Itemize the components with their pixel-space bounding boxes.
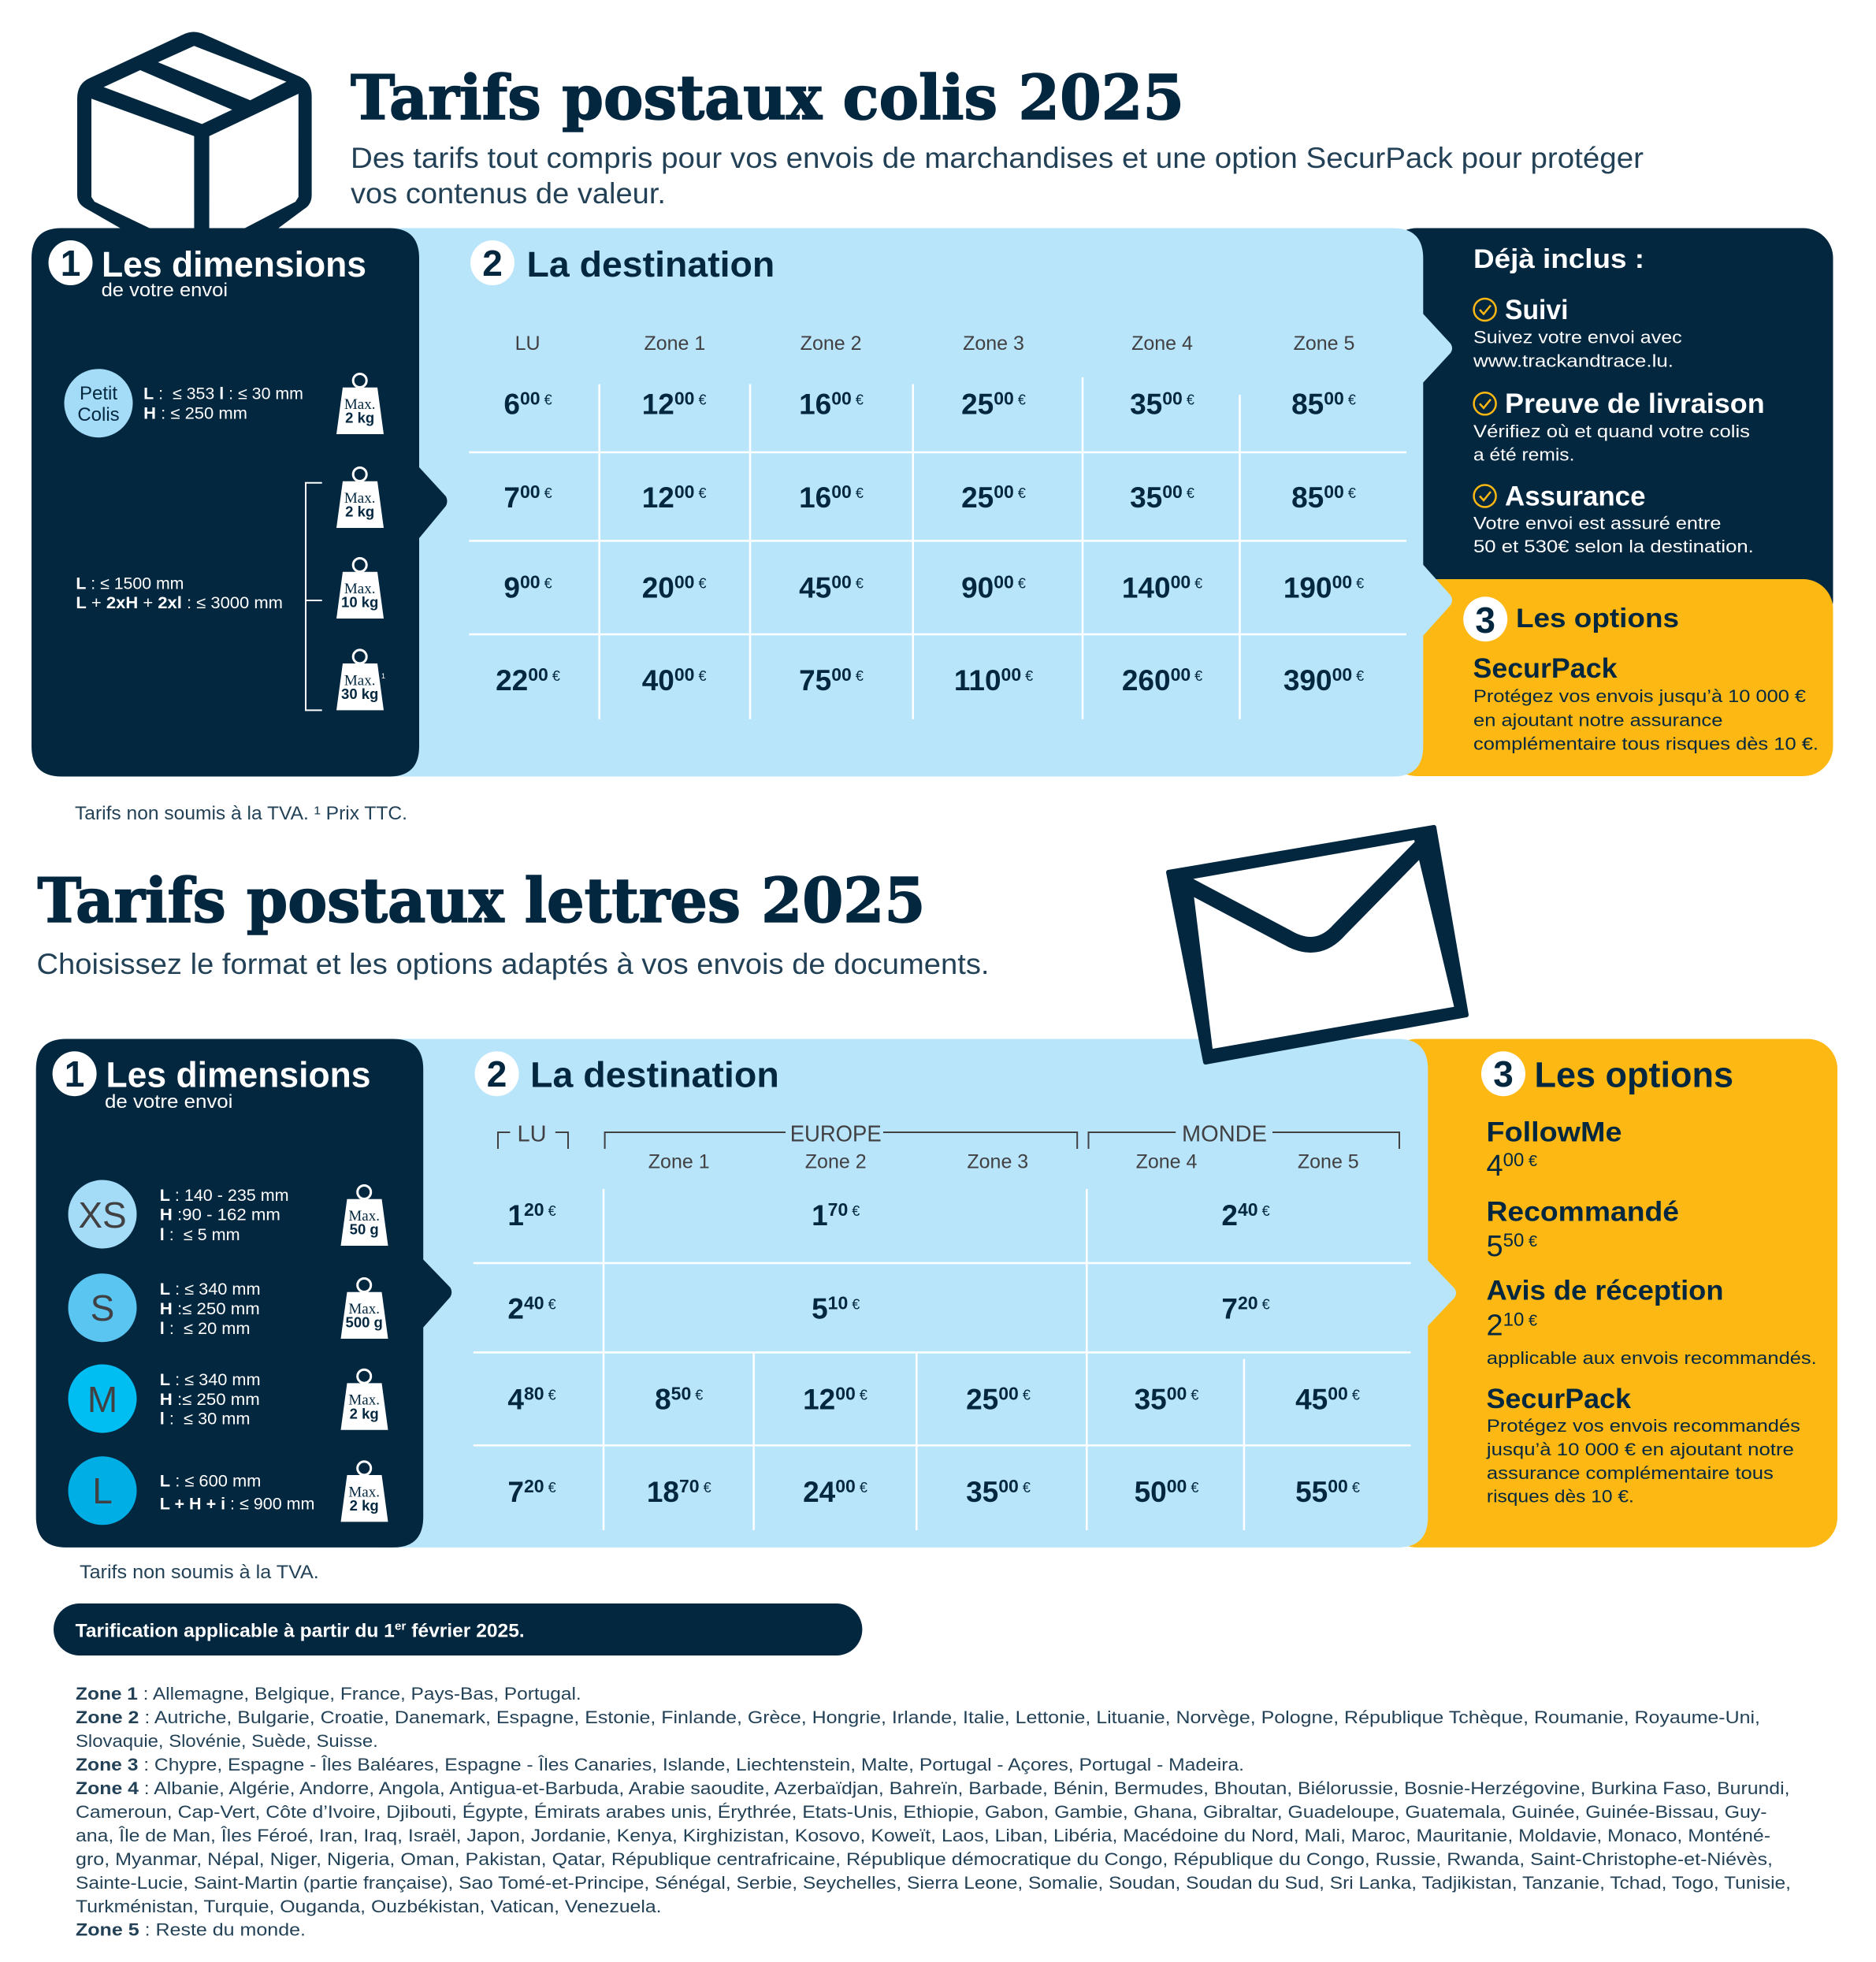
icon: weight 50 g: 50 g — [350, 1221, 379, 1238]
option: avis de reception: € — [1524, 1313, 1537, 1330]
price row 4: 50 — [1135, 1476, 1167, 1508]
price row 2: 20 — [1238, 1293, 1258, 1314]
item: suivi: Suivi — [1505, 295, 1568, 325]
price row 4: 00 — [1171, 664, 1191, 685]
icon: weight 50 g — [340, 1185, 388, 1246]
title: parcels: Tarifs postaux colis 2025 — [351, 62, 1184, 134]
price row 1: 16 — [799, 388, 831, 421]
price row 1 — [503, 388, 1356, 421]
price row 3: 140 — [1122, 572, 1171, 604]
price row 2: 7 — [1221, 1293, 1238, 1325]
text block: zone list: gro, Myanmar, Népal, Niger, Nigeria, Oman, Pakistan, Qatar, République centrafricaine, République démocratique du Congo, République du Congo, Russie, Rwanda, Saint-Christophe-et-Niévès, — [76, 1849, 1773, 1869]
table header: Zone 2 — [805, 1150, 867, 1172]
price row 4: 7 — [507, 1476, 524, 1508]
format: M: H :≤ 250 mm — [160, 1391, 260, 1409]
price row 2: 2 — [507, 1293, 524, 1325]
price row 4: 18 — [647, 1476, 679, 1508]
price row 2: 25 — [961, 481, 994, 514]
format: L: L — [92, 1470, 113, 1511]
item: preuve de livraison — [1473, 388, 1765, 465]
price row 4: 35 — [966, 1476, 998, 1508]
table header: Zone 5 — [1298, 1150, 1359, 1172]
format: XS: XS — [78, 1195, 127, 1236]
price row 1: € — [848, 1203, 860, 1219]
format: S: l : ≤ 20 mm — [160, 1320, 251, 1338]
option: securpack: Protégez vos envois recommandés — [1487, 1416, 1800, 1436]
price row 1: 00 — [1162, 388, 1183, 409]
intro text: parcels: vos contenus de valeur. — [351, 177, 666, 210]
price row 3: 00 — [674, 572, 694, 593]
option: followme: 00 — [1503, 1150, 1524, 1171]
price row 1: € — [852, 392, 864, 408]
price row 1: € — [1183, 392, 1194, 408]
format: L — [68, 1456, 315, 1525]
table header: Zone 4 — [1131, 333, 1193, 355]
price row 1: 00 — [994, 388, 1014, 409]
option: avis de reception — [1486, 1275, 1817, 1368]
table header: Zone 5 — [1294, 333, 1354, 355]
format: petit colis: Colis — [77, 404, 120, 425]
format: petit colis: Petit — [80, 383, 117, 404]
item: preuve de livraison: Vérifiez où et quand votre colis — [1473, 422, 1750, 441]
text block: zone list: Zone 2 : Autriche, Bulgarie, Croatie, Danemark, Espagne, Estonie, Finlande, Grèce, Hongrie, Irlande, Italie, Lettonie, Lituanie, Norvège, Pologne, République Tchèque, Roumanie, Royaume-Uni, — [76, 1707, 1760, 1727]
icon: weight 2 kg: 2 kg — [350, 1405, 379, 1421]
price row 3: 50 — [671, 1384, 691, 1404]
table header: LU — [515, 333, 541, 355]
price row 1: 85 — [1291, 388, 1324, 421]
heading: les dimensions — [105, 1054, 370, 1113]
price row 4: € — [694, 668, 706, 684]
icon: weight 30 kg: 30 kg — [341, 686, 378, 702]
table header: EUROPE — [790, 1122, 882, 1147]
format: S — [68, 1273, 261, 1342]
price row 4: € — [1021, 668, 1033, 684]
price row 4: 00 — [1001, 664, 1021, 685]
option: followme: FollowMe — [1486, 1117, 1622, 1148]
icon: weight 2 kg: 2 kg — [345, 410, 374, 426]
price row 4: 75 — [799, 664, 831, 697]
heading: les dimensions: Les dimensions — [102, 244, 366, 284]
option: securpack: assurance complémentaire tous — [1487, 1463, 1774, 1483]
price row 4: 260 — [1122, 664, 1171, 697]
badge: step 1 — [53, 1051, 97, 1096]
icon: weight 30 kg: Max. — [344, 672, 375, 689]
table header: Zone 1 — [644, 333, 705, 355]
price row 3: 00 — [1328, 1384, 1348, 1404]
price row 2: 10 — [828, 1293, 848, 1314]
text block: zone list: Turkménistan, Turquie, Ouganda, Ouzbékistan, Vatican, Venezuela. — [76, 1897, 662, 1916]
badge: step 1: 1 — [65, 1053, 84, 1094]
panel: dimensions letters — [36, 1039, 451, 1548]
icon: weight 500 g: Max. — [348, 1301, 380, 1317]
panel: options parcels — [1387, 579, 1833, 776]
format: M: L : ≤ 340 mm — [160, 1371, 261, 1389]
price row 3: € — [1019, 1387, 1031, 1403]
option: avis de reception: applicable aux envois recommandés. — [1487, 1348, 1817, 1368]
price row 3: 00 — [1332, 572, 1352, 593]
price row 1: € — [541, 392, 552, 408]
price row 4: 70 — [679, 1476, 700, 1496]
footnote: parcels: Tarifs non soumis à la TVA. ¹ Prix TTC. — [75, 803, 407, 824]
format: XS: L : 140 - 235 mm — [160, 1187, 289, 1205]
option: followme: € — [1524, 1153, 1537, 1170]
panel: destination letters — [378, 1039, 1456, 1548]
price row 2: 00 — [520, 481, 541, 502]
price row 2: € — [1258, 1297, 1270, 1313]
option: securpack: Protégez vos envois jusqu’à 10 000 € — [1473, 686, 1807, 706]
icon: weight 50 g: Max. — [348, 1208, 380, 1224]
price row 4: 00 — [1332, 664, 1352, 685]
price row 1: 12 — [642, 388, 674, 421]
heading: la destination: La destination — [530, 1054, 779, 1095]
price row 3: 20 — [642, 572, 674, 604]
icon: weight 500 g — [340, 1278, 388, 1339]
price row 3 — [503, 572, 1364, 604]
price row 2: 7 — [503, 481, 520, 514]
item: assurance: Votre envoi est assuré entre — [1473, 514, 1721, 533]
icon: weight 10 kg: 10 kg — [341, 594, 378, 611]
price row 2: 85 — [1291, 481, 1324, 514]
price row 2: 00 — [1324, 481, 1344, 502]
price row 3: 190 — [1283, 572, 1332, 604]
option: securpack: risques dès 10 €. — [1487, 1486, 1634, 1507]
price row 4: € — [1352, 668, 1364, 684]
table header: Zone 4 — [1136, 1150, 1198, 1172]
table header: Zone 1 — [648, 1150, 710, 1172]
format: L: L : ≤ 600 mm — [160, 1473, 261, 1491]
price row 3: 25 — [966, 1384, 998, 1415]
format: M: l : ≤ 30 mm — [160, 1410, 251, 1429]
price row 4: 00 — [1328, 1476, 1348, 1496]
price row 2: € — [1344, 485, 1356, 501]
option: followme — [1486, 1117, 1622, 1183]
price row 2: € — [852, 485, 864, 501]
format: L: L + H + i : ≤ 900 mm — [160, 1495, 315, 1513]
price row 3: € — [856, 1387, 867, 1403]
format: petit colis: L : ≤ 353 l : ≤ 30 mm — [143, 385, 303, 403]
price row 3: 4 — [507, 1384, 524, 1415]
price row 3: 90 — [961, 572, 994, 604]
table header: Zone 2 — [801, 333, 862, 355]
format: standard dimensions text: L + 2xH + 2xl : ≤ 3000 mm — [76, 594, 283, 612]
price row 4: € — [700, 1480, 711, 1496]
format: standard dimensions text: L : ≤ 1500 mm — [76, 574, 184, 593]
price row 2: € — [848, 1297, 860, 1313]
price row 1: 40 — [1238, 1199, 1258, 1220]
price row 3: 8 — [655, 1384, 671, 1415]
price row 1: 00 — [674, 388, 694, 409]
price row 4: 24 — [803, 1476, 835, 1508]
price row 4: € — [544, 1480, 556, 1496]
price row 1 — [507, 1199, 1270, 1232]
heading: les options: Les options — [1516, 604, 1679, 634]
price row 4: € — [1019, 1480, 1031, 1496]
price row 4: 00 — [835, 1476, 856, 1496]
icon: weight 30 kg — [336, 650, 385, 710]
format: standard dimensions text — [76, 574, 283, 612]
price row 3: 9 — [503, 572, 520, 604]
item: assurance: 50 et 530€ selon la destination. — [1473, 537, 1754, 556]
price row 3: € — [694, 576, 706, 592]
text block: zone list: Sainte-Lucie, Saint-Martin (partie française), Sao Tomé-et-Principe, Sénégal, Serbie, Seychelles, Sierra Leone, Somalie, Soudan, Soudan du Sud, Sri Lanka, Tadjikistan, Tanzanie, Tchad, Togo, Tunisie, — [76, 1873, 1791, 1893]
price row 2: 40 — [524, 1293, 544, 1314]
badge: step 3: 3 — [1475, 600, 1495, 641]
price row 4: 00 — [831, 664, 852, 685]
price row 3: 00 — [520, 572, 541, 593]
price row 2: 00 — [994, 481, 1014, 502]
option: avis de reception: 10 — [1503, 1310, 1524, 1330]
price row 1: 2 — [1221, 1199, 1238, 1232]
price row 1: € — [1344, 392, 1356, 408]
option: avis de reception: Avis de réception — [1486, 1275, 1724, 1306]
bracket — [306, 483, 322, 710]
price row 4: 22 — [496, 664, 528, 697]
icon: weight 2 kg: Max. — [344, 490, 375, 507]
price row 1: € — [1014, 392, 1026, 408]
icon: weight 2 kg: Max. — [344, 396, 375, 413]
callout: effective date — [54, 1603, 862, 1655]
heading: deja inclus: Déjà inclus : — [1473, 244, 1644, 274]
option: recommande: 50 — [1503, 1230, 1524, 1251]
price row 2: 5 — [812, 1293, 828, 1325]
callout: effective date: février 2025. — [406, 1621, 525, 1642]
price row 3: € — [691, 1387, 703, 1403]
price row 4: € — [852, 668, 864, 684]
price row 2: 12 — [642, 481, 674, 514]
format: S: H :≤ 250 mm — [160, 1300, 260, 1318]
intro text: parcels: Des tarifs tout compris pour vos envois de marchandises et une option SecurPack pour protéger — [351, 142, 1644, 174]
option: securpack — [1473, 653, 1818, 754]
item: preuve de livraison: a été remis. — [1473, 445, 1574, 465]
callout: effective date: er — [395, 1620, 407, 1633]
price row 3: 00 — [998, 1384, 1019, 1404]
option: securpack: jusqu’à 10 000 € en ajoutant notre — [1486, 1440, 1794, 1459]
icon: weight 2 kg — [340, 1462, 388, 1522]
price row 3: € — [544, 1387, 556, 1403]
icon: envelope — [1168, 827, 1466, 1062]
format: XS: l : ≤ 5 mm — [160, 1226, 240, 1244]
price row 3: € — [852, 576, 864, 592]
option: securpack — [1486, 1384, 1800, 1507]
price row 1: € — [544, 1203, 556, 1219]
price row 4: 40 — [642, 664, 674, 697]
price row 2: € — [541, 485, 552, 501]
icon: weight 2 kg: 2 kg — [350, 1497, 379, 1514]
option: avis de reception: 2 — [1486, 1310, 1503, 1343]
price row 3: 00 — [994, 572, 1014, 593]
price row 4 — [496, 664, 1364, 697]
icon: weight 10 kg — [336, 558, 384, 619]
price row 2: 00 — [1162, 481, 1183, 502]
price row 2: € — [1183, 485, 1194, 501]
price row 1: 1 — [507, 1199, 524, 1232]
format: petit colis: H : ≤ 250 mm — [143, 405, 247, 423]
option: recommande: 5 — [1486, 1230, 1503, 1263]
table header: LU — [517, 1122, 547, 1147]
price row 1: 20 — [524, 1199, 544, 1220]
price row 4: € — [1191, 668, 1202, 684]
intro text: letters: Choisissez le format et les options adaptés à vos envois de documents. — [36, 948, 990, 980]
title: letters: Tarifs postaux lettres 2025 — [38, 865, 925, 937]
text block: zone list: Slovaquie, Slovénie, Suède, Suisse. — [76, 1731, 378, 1751]
panel: destination parcels — [378, 229, 1452, 777]
heading: les dimensions: Les dimensions — [106, 1054, 370, 1095]
format: XS — [68, 1180, 289, 1248]
option: recommande — [1486, 1196, 1679, 1263]
badge: step 3 — [1481, 1051, 1525, 1096]
price row 3: 35 — [1135, 1384, 1167, 1415]
format: M — [68, 1365, 261, 1432]
option: securpack: SecurPack — [1486, 1384, 1632, 1414]
badge: step 2: 2 — [482, 243, 503, 284]
price row 4: 00 — [528, 664, 548, 685]
price row 3: 00 — [831, 572, 852, 593]
price row 2: € — [694, 485, 706, 501]
price row 4: € — [548, 668, 560, 684]
icon: parcel box — [77, 32, 312, 230]
price row 2: 16 — [799, 481, 831, 514]
panel: dimensions parcels — [32, 229, 448, 777]
text block: zone list — [76, 1684, 1791, 1940]
text block: zone list: Zone 3 : Chypre, Espagne - Îles Baléares, Espagne - Îles Canaries, Islande, Liechtenstein, Malte, Portugal - Açores, Portugal - Madeira. — [76, 1755, 1244, 1774]
badge: step 3 — [1463, 596, 1507, 641]
badge: step 1 — [49, 240, 93, 285]
icon: weight 2 kg — [340, 1369, 388, 1430]
price row 4 — [507, 1476, 1360, 1508]
price row 2 — [503, 481, 1356, 514]
text block: zone list: Zone 5 : Reste du monde. — [76, 1919, 306, 1940]
price row 1: 00 — [520, 388, 541, 409]
table header — [515, 333, 1354, 355]
badge: step 2 — [470, 240, 515, 285]
price row 3: 80 — [524, 1384, 544, 1404]
price row 4: 390 — [1283, 664, 1332, 697]
price row 3: 00 — [1171, 572, 1191, 593]
item: suivi: Suivez votre envoi avec — [1473, 327, 1682, 347]
price row 1: 35 — [1130, 388, 1162, 421]
option: recommande: Recommandé — [1486, 1196, 1679, 1228]
footnote: letters: Tarifs non soumis à la TVA. — [80, 1562, 319, 1583]
price row 4: € — [856, 1480, 867, 1496]
price row 4: € — [1187, 1480, 1198, 1496]
price row 1: 00 — [1324, 388, 1344, 409]
price row 3: € — [541, 576, 552, 592]
icon: weight 500 g: 500 g — [346, 1314, 383, 1331]
table header: MONDE — [1182, 1122, 1267, 1147]
icon: weight 2 kg: 2 kg — [345, 504, 374, 520]
icon: weight 30 kg: 1 — [381, 672, 385, 680]
table header — [498, 1122, 1399, 1172]
price row 3: 45 — [799, 572, 831, 604]
text block: zone list: Zone 1 : Allemagne, Belgique, France, Pays-Bas, Portugal. — [76, 1684, 581, 1704]
icon: weight 10 kg: Max. — [344, 581, 375, 597]
price row 1: 70 — [828, 1199, 848, 1220]
option: followme: 4 — [1486, 1150, 1503, 1183]
price row 4: 00 — [998, 1476, 1019, 1496]
icon: weight 2 kg: Max. — [348, 1484, 380, 1500]
badge: step 1: 1 — [61, 243, 80, 284]
heading: les dimensions: de votre envoi — [105, 1091, 232, 1113]
panel: included services — [1387, 229, 1833, 630]
price row 2: € — [544, 1297, 556, 1313]
format: M: M — [87, 1379, 117, 1420]
price row 3: 45 — [1295, 1384, 1328, 1415]
heading: les dimensions: de votre envoi — [102, 280, 228, 301]
option: securpack: en ajoutant notre assurance — [1473, 711, 1722, 730]
price row 2: € — [1014, 485, 1026, 501]
price row 3: € — [1014, 576, 1026, 592]
price row 3: € — [1348, 1387, 1360, 1403]
panel: options letters — [1387, 1039, 1837, 1548]
item: assurance: Assurance — [1505, 481, 1645, 511]
price row 3: 12 — [803, 1384, 835, 1415]
format: XS: H :90 - 162 mm — [160, 1206, 280, 1224]
text block: zone list: Zone 4 : Albanie, Algérie, Andorre, Angola, Antigua-et-Barbuda, Arabie saoudite, Azerbaïdjan, Bahreïn, Barbade, Bénin, Bermudes, Bhoutan, Biélorussie, Bosnie-Herzégovine, Burkina Faso, Burundi, — [76, 1778, 1790, 1798]
price row 4: € — [1348, 1480, 1360, 1496]
table header: Zone 3 — [963, 333, 1024, 355]
price row 2: 35 — [1130, 481, 1162, 514]
price row 1: € — [1258, 1203, 1270, 1219]
option: securpack: SecurPack — [1473, 653, 1618, 684]
option: recommande: € — [1524, 1233, 1537, 1250]
callout: effective date: Tarification applicable à partir du 1 — [76, 1621, 387, 1642]
price row 4: 55 — [1295, 1476, 1328, 1508]
heading: la destination: La destination — [526, 244, 775, 284]
price row 3: 00 — [1167, 1384, 1187, 1404]
price row 1: 1 — [812, 1199, 828, 1232]
item: preuve de livraison: Preuve de livraison — [1505, 388, 1765, 419]
text block: zone list: ana, Île de Man, Îles Féroé, Iran, Iraq, Israël, Japon, Jordanie, Kenya, Kirghizistan, Kosovo, Koweït, Laos, Liban, Libéria, Macédoine du Nord, Mali, Maroc, Mauritanie, Moldavie, Monaco, Monténé- — [76, 1826, 1770, 1845]
item: suivi: www.trackandtrace.lu. — [1473, 351, 1674, 370]
format: petit colis — [65, 369, 303, 437]
intro text: parcels — [351, 142, 1644, 210]
badge: step 2 — [475, 1051, 519, 1096]
badge: step 2: 2 — [487, 1053, 507, 1094]
price row 3: € — [1191, 576, 1202, 592]
heading: les options: Les options — [1535, 1054, 1733, 1095]
price row 1: € — [694, 392, 706, 408]
icon: weight 2 kg — [336, 373, 384, 434]
price row 4: 110 — [954, 664, 1001, 697]
text block: zone list: Cameroun, Cap-Vert, Côte d’Ivoire, Djibouti, Égypte, Émirats arabes unis, Érythrée, Etats-Unis, Ethiopie, Gabon, Gambie, Ghana, Gibraltar, Guadeloupe, Guatemala, Guinée, Guinée-Bissau, Guy- — [76, 1802, 1766, 1822]
price row 2: 00 — [674, 481, 694, 502]
price row 4: 00 — [674, 664, 694, 685]
price row 3: € — [1352, 576, 1364, 592]
price row 3 — [507, 1384, 1360, 1415]
option: securpack: complémentaire tous risques dès 10 €. — [1473, 734, 1818, 754]
price row 4: 20 — [524, 1476, 544, 1496]
price row 1: 25 — [961, 388, 994, 421]
item: assurance — [1473, 481, 1754, 556]
price row 2: 00 — [831, 481, 852, 502]
icon: weight 2 kg — [336, 468, 384, 528]
table header: Zone 3 — [967, 1150, 1028, 1172]
format: S: L : ≤ 340 mm — [160, 1280, 261, 1299]
format: S: S — [91, 1288, 114, 1328]
price row 1: 6 — [503, 388, 520, 421]
badge: step 3: 3 — [1493, 1053, 1514, 1094]
price row 1: 00 — [831, 388, 852, 409]
icon: weight 2 kg: Max. — [348, 1392, 380, 1409]
price row 3: 00 — [835, 1384, 856, 1404]
price row 4: 00 — [1167, 1476, 1187, 1496]
price row 3: € — [1187, 1387, 1198, 1403]
item: suivi — [1473, 295, 1682, 370]
price row 2 — [507, 1293, 1270, 1325]
